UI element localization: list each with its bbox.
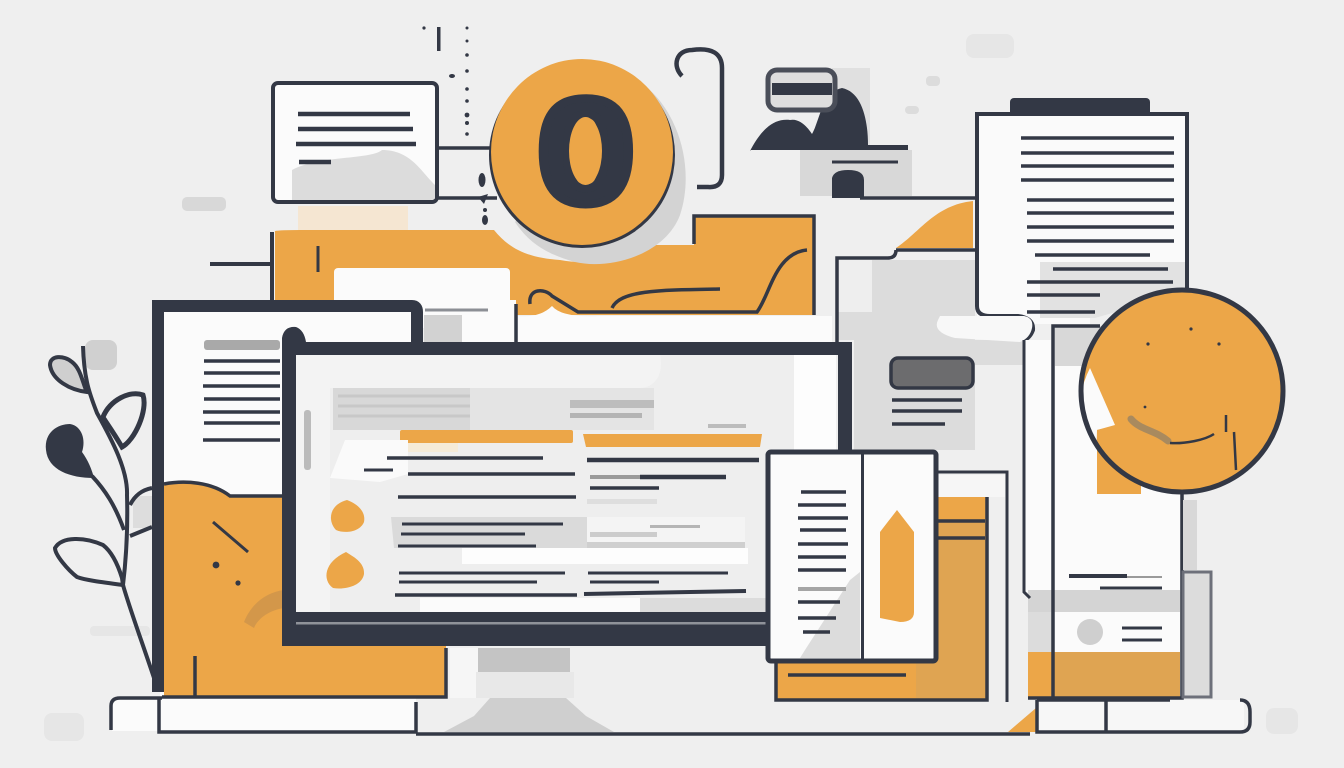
bracket right of badge <box>677 49 722 187</box>
main monitor <box>282 327 852 646</box>
top-right small icon cluster <box>750 68 975 198</box>
orange box behind tablet <box>776 472 1007 702</box>
orange dots <box>331 500 364 532</box>
monitor stand <box>444 648 614 732</box>
pale pill below document <box>937 316 1032 342</box>
tablet with text and orange marker <box>768 452 936 661</box>
screen grey text rows <box>470 388 654 430</box>
bottom desk <box>111 698 1250 734</box>
small top-left document card <box>273 83 497 202</box>
content rows <box>330 440 408 482</box>
orange badge with zero <box>489 59 686 264</box>
zero numeral: 0 <box>536 67 636 235</box>
dotted vertical marks <box>422 26 488 225</box>
left browser window <box>158 306 446 700</box>
right panel background block <box>837 201 1024 450</box>
right lower column <box>1024 326 1211 698</box>
orange face circle <box>1079 290 1283 494</box>
plant with leaves <box>46 340 158 690</box>
orange folder band <box>210 206 832 342</box>
right tall document <box>937 98 1187 342</box>
orange header bars <box>400 430 573 443</box>
